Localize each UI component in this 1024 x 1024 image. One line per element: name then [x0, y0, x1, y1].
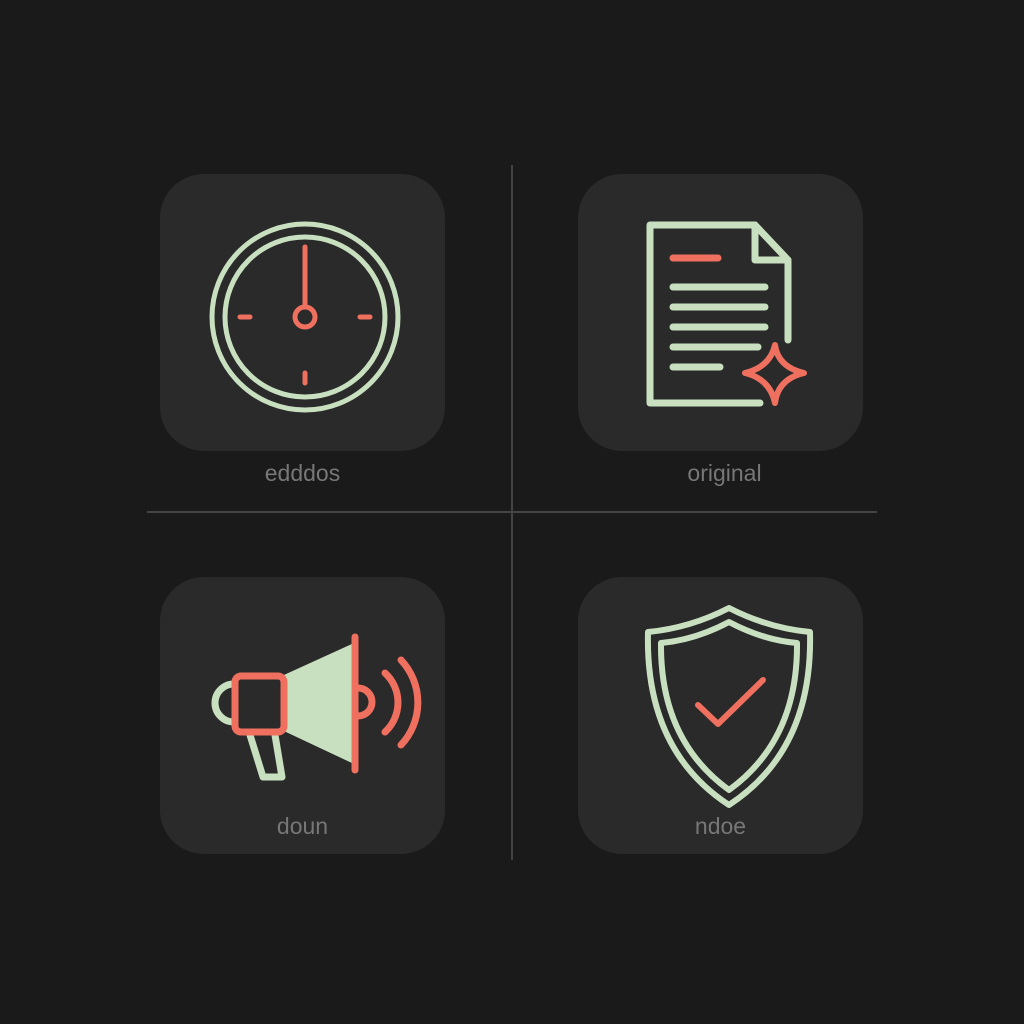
- label: original: original: [687, 460, 762, 486]
- label: doun: doun: [277, 813, 328, 839]
- icon: clock: [212, 224, 398, 410]
- icon: shield: [648, 608, 810, 805]
- label: ndoe: ndoe: [695, 813, 746, 839]
- panel: clock: [160, 174, 445, 451]
- label: edddos: edddos: [265, 460, 340, 486]
- divider vertical: [511, 165, 513, 860]
- divider horizontal: [147, 511, 877, 513]
- panel: megaphone: [160, 577, 445, 854]
- panel: shield: [578, 577, 863, 854]
- icon: megaphone: [215, 637, 418, 777]
- icon: document: [650, 225, 804, 403]
- panel: document: [578, 174, 863, 451]
